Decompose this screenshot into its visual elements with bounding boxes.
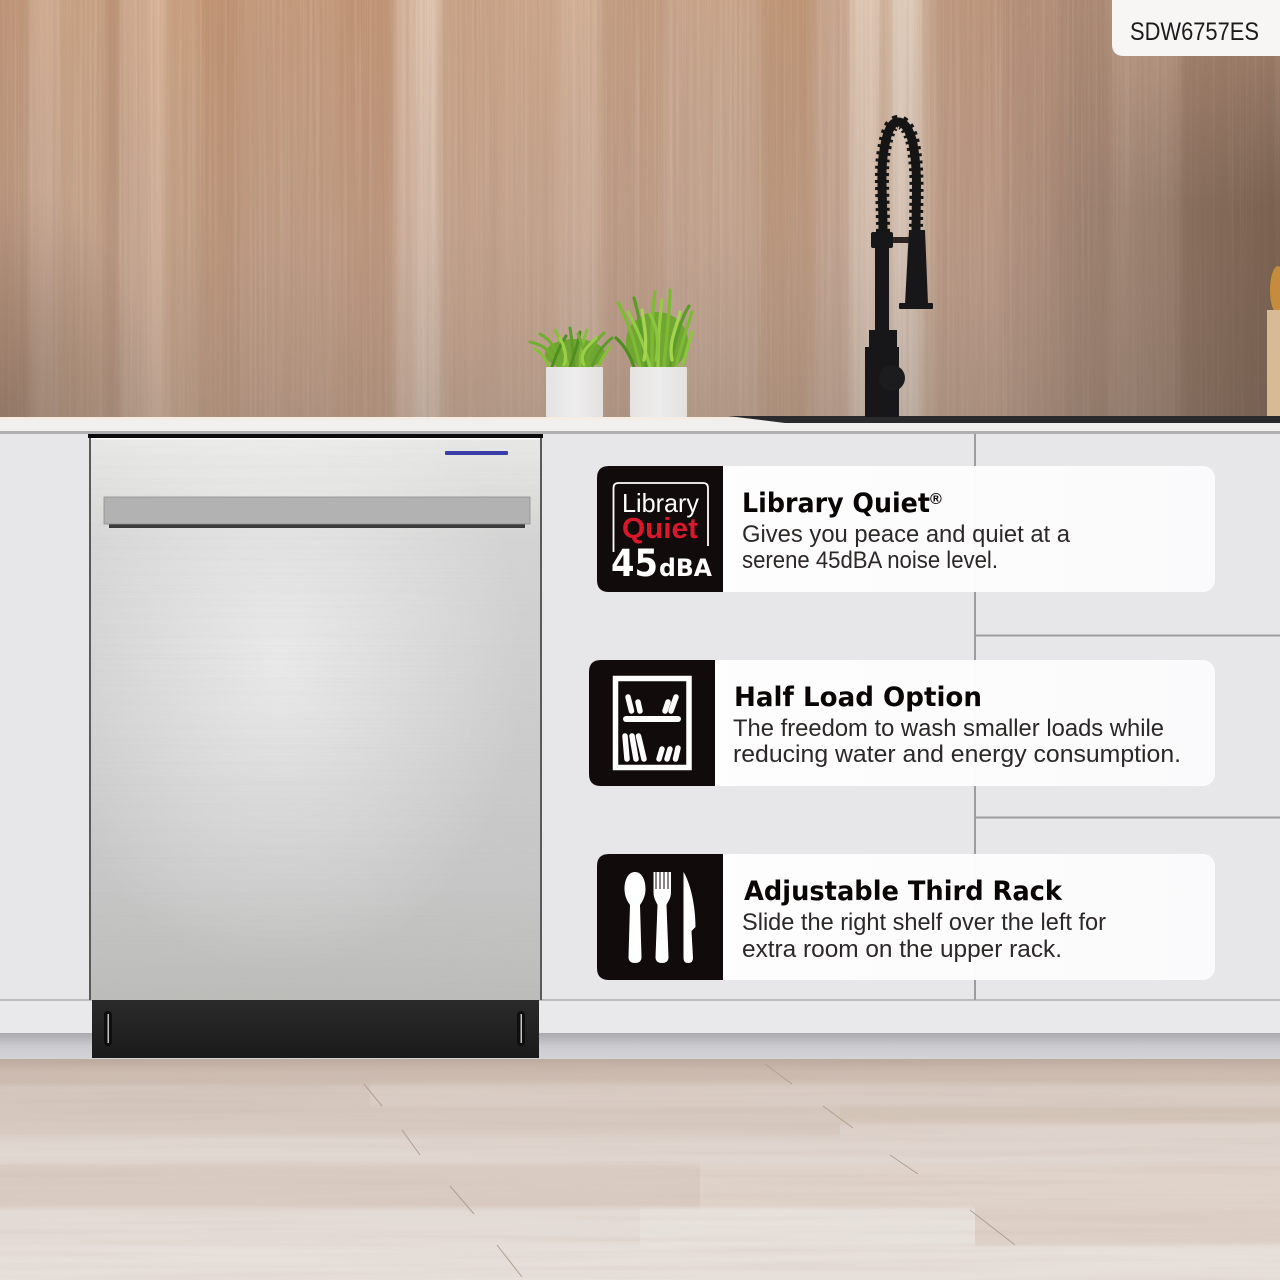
panel: Half Load Option (589, 660, 1215, 786)
icon: Library Quiet 45dBA badge: dBA (659, 554, 712, 582)
heading: Library Quiet (742, 488, 930, 519)
icon: Library Quiet 45dBA badge (597, 466, 723, 592)
description: extra room on the upper rack. (742, 936, 1062, 963)
status light (445, 451, 508, 455)
icon: dish rack (589, 660, 715, 786)
panel: Library Quiet (597, 466, 1215, 592)
wood panel wall (0, 0, 1280, 418)
plant: right pot (616, 290, 692, 417)
description (733, 715, 1181, 768)
right edge decor: box and nut (1267, 266, 1280, 417)
icon: Library Quiet 45dBA badge: Quiet (622, 513, 698, 545)
model tag: SDW6757ES (1130, 18, 1259, 46)
description: reducing water and energy consumption. (733, 741, 1181, 768)
description (742, 909, 1106, 963)
countertop (0, 417, 1280, 434)
registered mark: ® (930, 491, 942, 508)
icon: spoon, fork and knife (597, 854, 723, 980)
door body (88, 434, 543, 1000)
icon: Library Quiet 45dBA badge: 45 (611, 542, 658, 585)
panel: Adjustable Third Rack (597, 854, 1215, 980)
description (742, 521, 1071, 574)
plant: left pot (530, 328, 612, 417)
description: The freedom to wash smaller loads while (733, 715, 1164, 742)
icon: Library Quiet 45dBA badge: Library (622, 488, 699, 518)
description: Slide the right shelf over the left for (742, 909, 1106, 936)
floor (0, 1055, 1280, 1280)
description: serene 45dBA noise level. (742, 547, 998, 574)
description: Gives you peace and quiet at a (742, 521, 1071, 548)
model tag (1112, 0, 1280, 56)
heading: Adjustable Third Rack (744, 876, 1063, 907)
toe kick (92, 1000, 539, 1058)
sink (728, 416, 1280, 423)
faucet (865, 122, 933, 417)
base cabinets (0, 433, 1280, 1059)
handle (104, 497, 530, 528)
heading: Half Load Option (734, 682, 982, 713)
dishwasher (88, 434, 543, 1058)
